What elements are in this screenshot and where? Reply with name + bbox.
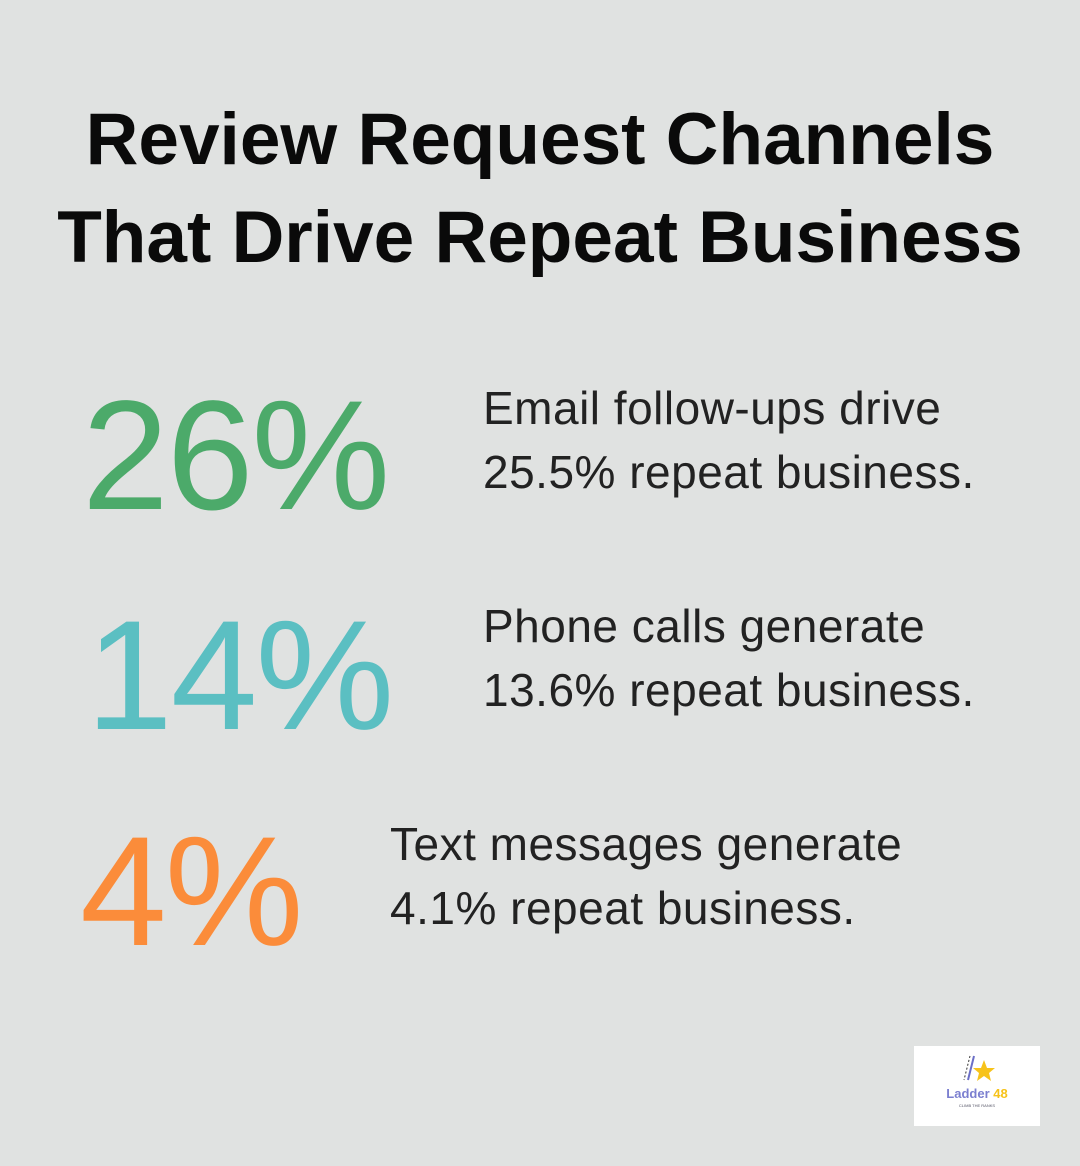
text: sms: Text messages generate [390,818,902,870]
text: phone: Phone calls generate [483,600,925,652]
logo [914,1046,1040,1126]
number 26%: 26% [82,369,388,543]
text: sms: 4.1% repeat business. [390,882,856,934]
logo: CLIMB THE RANKS [959,1103,995,1108]
text: phone: 13.6% repeat business. [483,664,975,716]
text: phone [483,600,975,716]
logo text: Ladder 48 [946,1086,1008,1101]
text: email [483,382,975,498]
stat: text [80,805,902,979]
stat: email [82,369,975,543]
text: email: Email follow-ups drive [483,382,941,434]
icon: star ladder [964,1056,995,1081]
title: That Drive Repeat Business [57,197,1023,278]
title: Review Request Channels [86,99,994,180]
text: email: 25.5% repeat business. [483,446,975,498]
title [57,99,1023,278]
text: sms [390,818,902,934]
stat: phone [86,589,975,763]
number 4%: 4% [80,805,301,979]
number 14%: 14% [86,589,392,763]
